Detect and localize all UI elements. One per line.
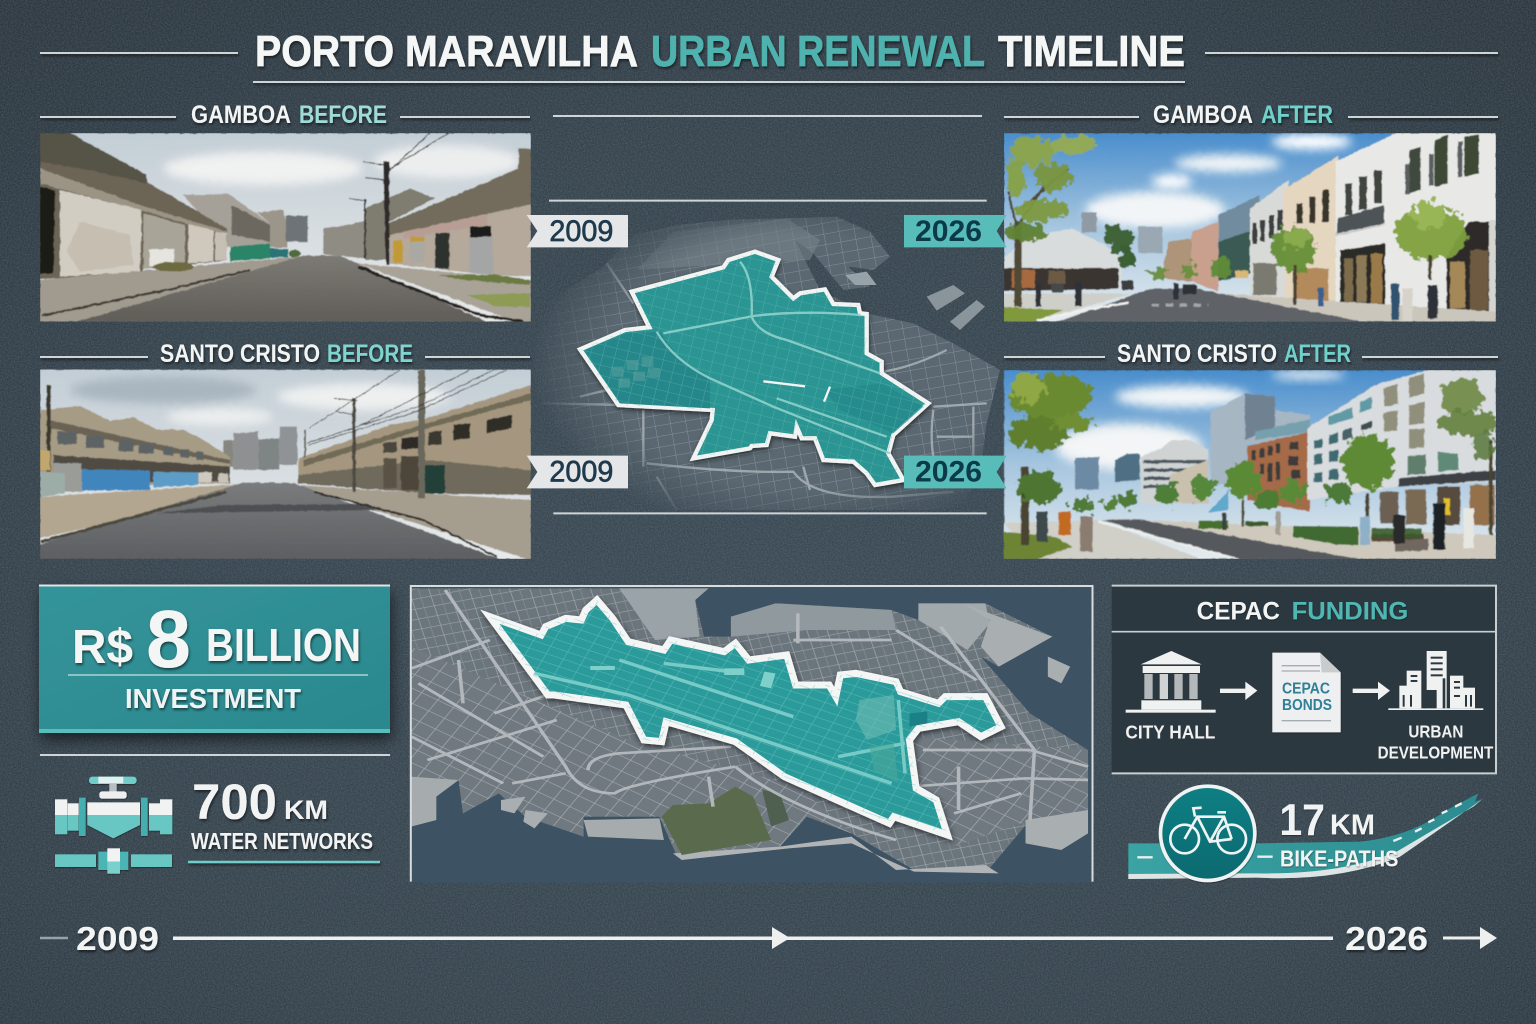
photo: Gamboa after [1003,133,1496,322]
arrow: end of timeline [1443,927,1497,949]
heading: Gamboa before: GAMBOA [191,101,291,129]
title [40,27,1498,82]
label: urban development [1378,721,1494,762]
street map base [530,217,1000,510]
heading: Santo Cristo before [40,340,530,368]
panel: CEPAC funding [1112,586,1496,773]
heading: Gamboa after [1004,101,1498,129]
label: urban development: URBAN [1408,721,1463,741]
stat: 17 km bike paths [1128,784,1483,882]
start year: 2009 [76,920,159,957]
icon: CEPAC bonds document: CEPAC [1282,680,1330,697]
map: full Porto Maravilha district [411,586,1093,883]
title: PORTO MARAVILHA [255,27,638,76]
highlighted zone [580,252,928,485]
rule: above central map heading [553,115,982,117]
stat: 700 km water networks [188,774,380,862]
road ribbon [1128,793,1483,879]
highlighted zone [490,600,1001,835]
investment amount [72,594,361,685]
icon: CEPAC bonds document: BONDS [1282,697,1332,714]
year tag 2026 lower: 2026 [915,456,982,489]
photo: Santo Cristo before [40,369,531,559]
divider under investment [40,754,390,756]
heading: Gamboa after: AFTER [1261,101,1333,129]
title: TIMELINE [998,27,1185,76]
icon: water valve [55,777,172,874]
investment label: INVESTMENT [125,683,301,714]
timeline bar with midpoint arrow [173,927,1333,949]
heading: Gamboa before [40,101,530,129]
stat text: 17 [1279,796,1325,845]
stat text: BIKE-PATHS [1280,846,1398,872]
investment amount: R$ [72,621,133,674]
photo: Gamboa before [40,133,531,322]
title: URBAN RENEWAL [651,27,985,76]
label: urban development: DEVELOPMENT [1378,742,1494,762]
photo: Santo Cristo after [1003,370,1498,559]
stat: 700 km water networks: WATER NETWORKS [191,828,373,854]
stat: 700 km water networks: KM [284,795,328,825]
map: central district (Gamboa and Santo Cristo) [527,201,1007,513]
heading: Santo Cristo after: SANTO CRISTO [1117,340,1277,368]
icon: bicycle badge [1159,784,1257,882]
map frame [411,586,1093,882]
arrow: city hall to bonds [1220,682,1257,700]
timeline: 2009 to 2026 [40,920,1497,957]
icon: city hall [1126,651,1216,713]
panel heading [1197,597,1408,625]
year tag 2009 lower [527,456,628,489]
stat: 700 km water networks: 700 [192,774,277,830]
panel heading: CEPAC [1197,597,1280,625]
year tag 2026 lower [904,456,1007,489]
heading: Santo Cristo after: AFTER [1284,340,1351,368]
rules above and below map [549,201,987,513]
panel heading: FUNDING [1292,597,1408,625]
heading: Gamboa before: BEFORE [299,101,387,129]
heading: Santo Cristo before: BEFORE [327,340,413,368]
investment amount: 8 [146,594,191,685]
icon: city skyline [1388,651,1483,710]
year tag 2009 upper [527,215,628,248]
end year: 2026 [1345,920,1428,957]
heading: Santo Cristo before: SANTO CRISTO [160,340,320,368]
label: city hall: CITY HALL [1125,721,1215,742]
year tag 2026 upper: 2026 [915,215,982,248]
year tag 2009 upper: 2009 [549,215,613,248]
investment amount: BILLION [206,619,361,671]
icon: CEPAC bonds document [1272,653,1341,732]
land and street blocks [411,588,1088,873]
year tag 2009 lower: 2009 [549,456,613,489]
year tag 2026 upper [904,215,1007,248]
heading: Santo Cristo after [1004,340,1498,368]
heading: Gamboa after: GAMBOA [1153,101,1253,129]
panel: investment [39,584,390,733]
stat text [1279,796,1398,872]
stat text: KM [1330,809,1375,841]
arrow: bonds to development [1353,682,1390,700]
